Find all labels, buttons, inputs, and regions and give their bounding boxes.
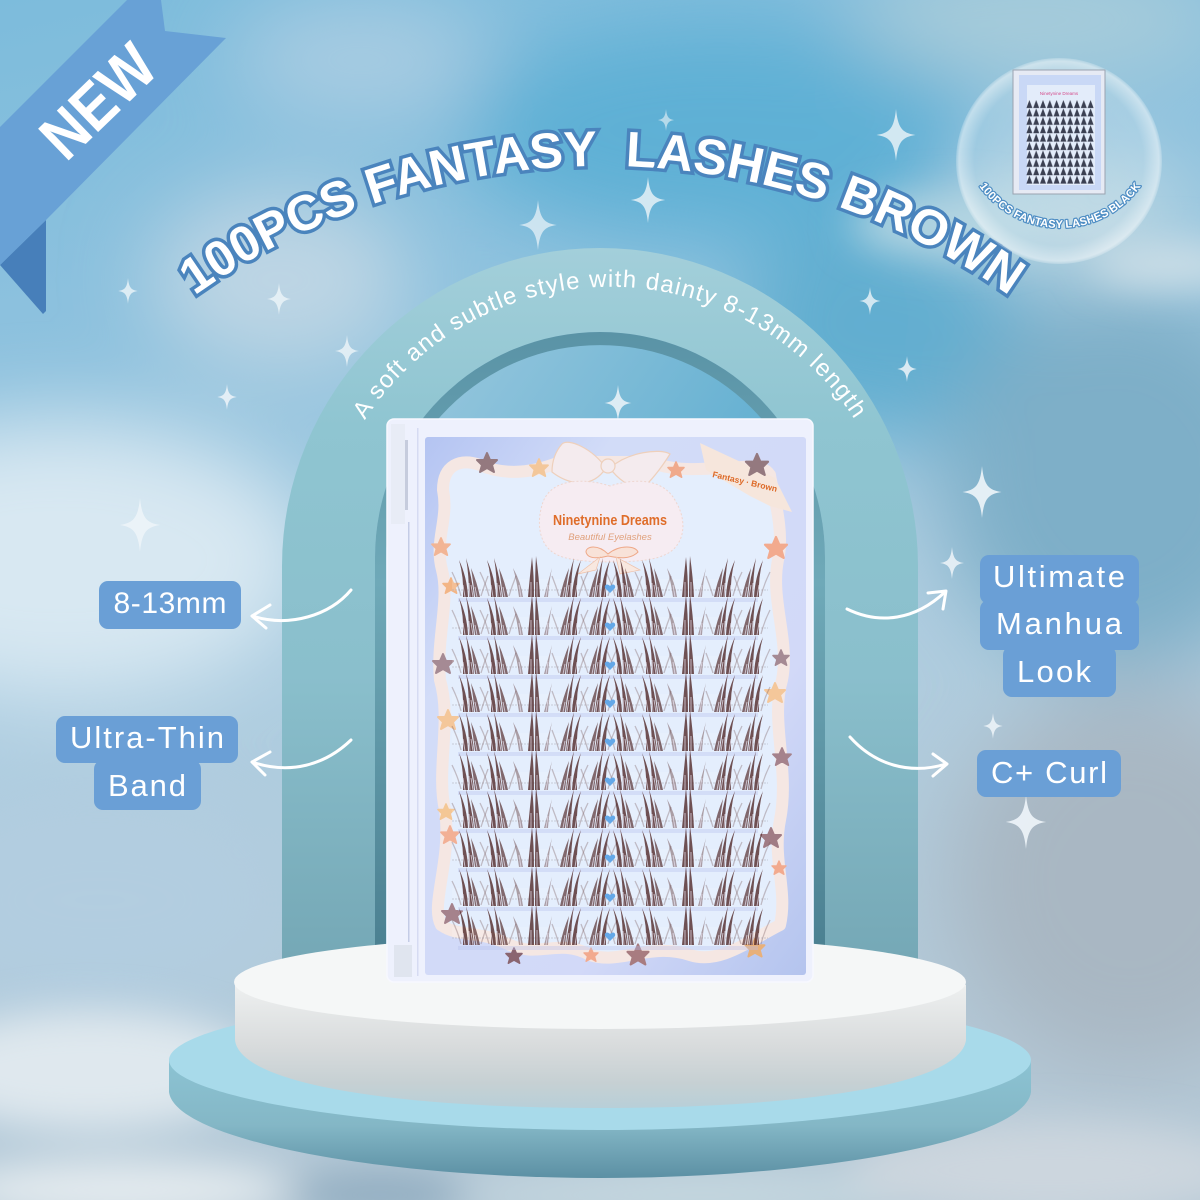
arrow: to Ultimate Manhua Look [847, 591, 946, 618]
podium [169, 935, 1031, 1178]
logo plaque: Beautiful Eyelashes [568, 532, 652, 543]
stars [432, 453, 791, 964]
label: Ultra-Thin Band: Band [108, 768, 186, 803]
label: Ultra-Thin Band: Ultra-Thin [70, 720, 224, 755]
title arched: 100PCS FANTASY LASHES BROWN [177, 128, 1031, 299]
label: 8-13mm: 8-13mm [114, 587, 226, 620]
arrow: to 8-13mm [252, 590, 351, 628]
card artwork [425, 437, 806, 975]
podium base disc [169, 990, 1031, 1178]
logo plaque [539, 481, 683, 574]
bubble caption: 100PCS FANTASY LASHES BLACK [978, 180, 1142, 230]
lash rows [452, 556, 770, 950]
NEW corner ribbon [0, 0, 226, 314]
label: Ultimate Manhua Look: Manhua [996, 606, 1123, 641]
fantasy brown ribbon tag: Fantasy · Brown [712, 469, 778, 494]
label: C+ Curl [977, 750, 1121, 797]
arch [282, 248, 918, 960]
arrow: to C+ Curl [850, 737, 947, 776]
bubble product case: Ninetynine Dreams [1040, 91, 1079, 96]
label: Ultimate Manhua Look: Ultimate [993, 559, 1125, 594]
product case [387, 419, 813, 982]
label: Ultra-Thin Band [56, 716, 238, 810]
sparkles [118, 109, 1046, 849]
label: C+ Curl: C+ Curl [991, 755, 1107, 790]
arched subtitle: A soft and subtle style with dainty 8-13mm length [355, 269, 864, 420]
ribbon frame [438, 462, 784, 958]
NEW corner ribbon: NEW [26, 29, 171, 173]
bubble inset: black variant [956, 58, 1162, 264]
label: Ultimate Manhua Look [980, 555, 1139, 697]
bow [552, 442, 670, 491]
fantasy brown ribbon tag [700, 443, 792, 512]
arrow: to Ultra-Thin Band [252, 740, 351, 775]
label: 8-13mm [99, 581, 241, 629]
bubble product case [1013, 70, 1105, 194]
logo plaque: Ninetynine Dreams [553, 513, 667, 529]
label: Ultimate Manhua Look: Look [1017, 654, 1092, 689]
podium top disc [234, 935, 966, 1108]
